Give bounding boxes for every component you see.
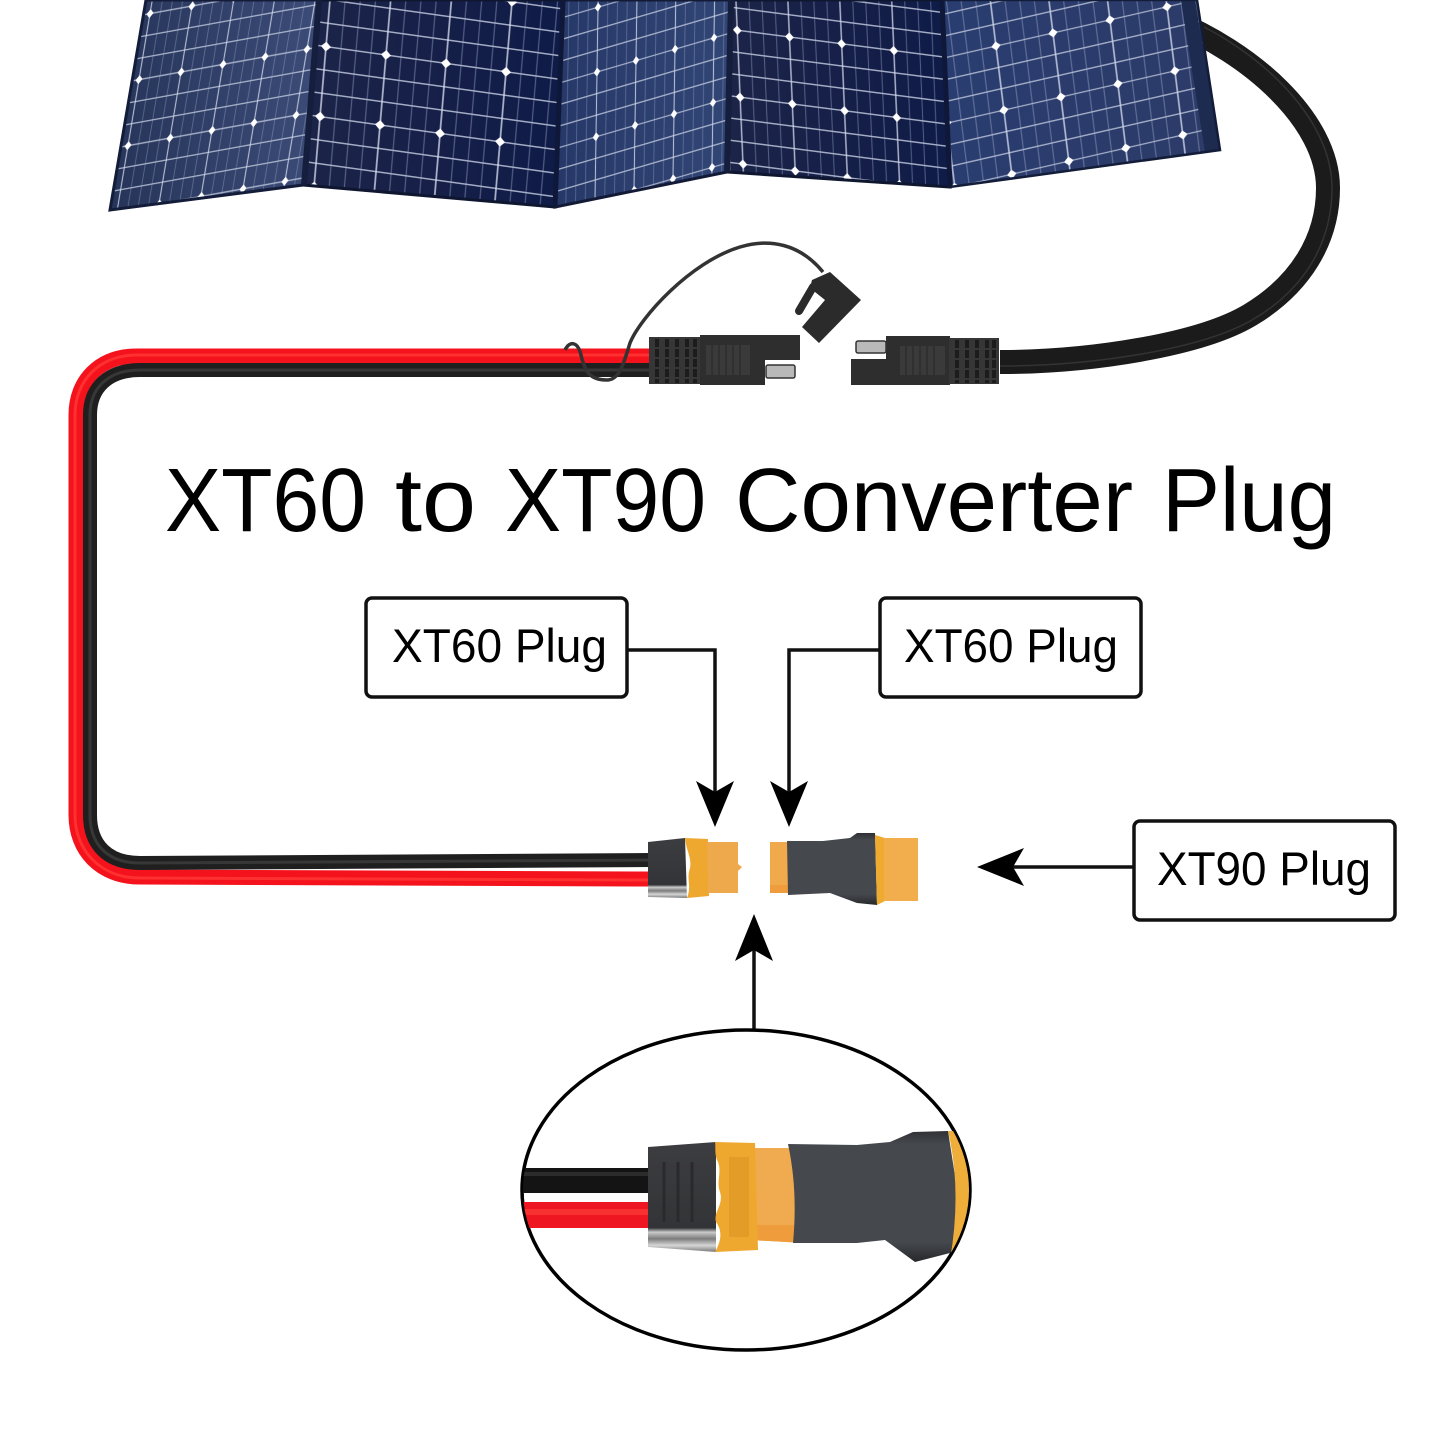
dark sleeve — [787, 833, 877, 905]
title: XT90 — [505, 451, 706, 551]
arrow: XT90 label to adapter — [977, 848, 1134, 886]
dark sleeve — [788, 1131, 965, 1262]
SAE connector left — [649, 335, 800, 385]
title: XT60 — [165, 451, 366, 551]
yellow collar — [685, 838, 709, 898]
arrow: magnified view to connectors — [735, 914, 773, 1031]
black cable from panel to SAE connector — [1000, 20, 1332, 366]
yellow XT90 end — [948, 1131, 969, 1252]
cap tether wire — [565, 243, 823, 380]
grey shell — [648, 838, 687, 898]
yellow collar — [715, 1142, 758, 1252]
magnified connector view — [515, 1030, 975, 1350]
panel section 1 — [110, 0, 320, 210]
title: to — [395, 451, 476, 551]
title: Plug — [1162, 451, 1336, 551]
orange XT90 body — [884, 838, 918, 901]
orange housing — [707, 842, 742, 893]
label: XT90 plug: XT90 Plug — [1157, 842, 1371, 895]
solar panel — [110, 0, 1220, 210]
arrow: left XT60 label to plug — [627, 650, 734, 827]
label: XT60 plug left: XT60 Plug — [392, 619, 607, 672]
panel section 4 — [727, 0, 950, 187]
title — [165, 451, 1336, 551]
panel section 2 — [303, 0, 563, 207]
label: XT90 plug — [1134, 821, 1395, 920]
grey shell — [648, 1142, 716, 1252]
red wire — [76, 356, 650, 879]
yellow XT90 collar — [875, 835, 885, 905]
arrow: right XT60 label to adapter — [770, 650, 880, 827]
SAE connector right — [851, 336, 999, 385]
metal pin — [766, 365, 795, 378]
metal pin — [856, 341, 886, 353]
panel section 5 — [942, 0, 1220, 187]
ribbed grip — [649, 337, 701, 384]
black wire — [90, 370, 650, 863]
red wire — [515, 1202, 650, 1228]
orange housing — [755, 1148, 795, 1242]
black wire — [515, 1168, 650, 1193]
ribbed grip — [949, 338, 999, 384]
body — [700, 335, 800, 385]
label: XT60 plug left — [366, 598, 627, 697]
XT60 to XT90 adapter — [770, 833, 918, 905]
orange XT60 end — [770, 842, 789, 893]
red and black cable — [75, 355, 650, 880]
XT60 plug on cable — [648, 838, 742, 898]
body — [851, 336, 950, 385]
title: Converter — [735, 451, 1133, 551]
panel section 3 — [555, 0, 731, 207]
SAE dust cap — [799, 272, 861, 343]
label: XT60 plug right: XT60 Plug — [904, 619, 1118, 672]
label: XT60 plug right — [880, 598, 1141, 697]
lens outline — [522, 1030, 970, 1350]
